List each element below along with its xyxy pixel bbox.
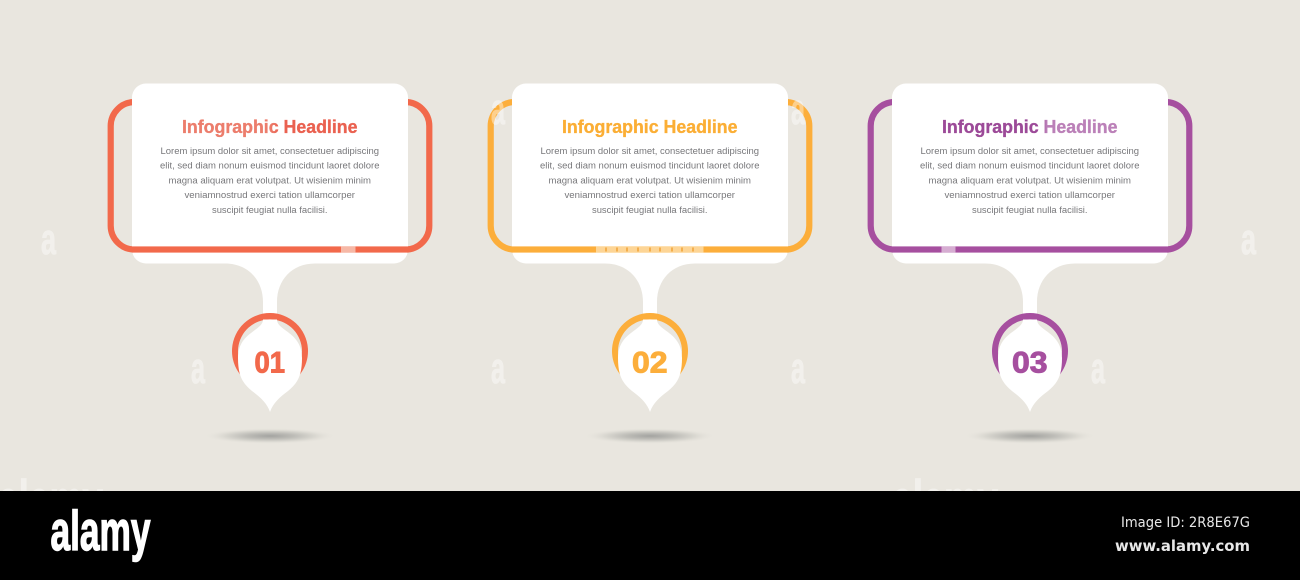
body text: veniamnostrud exerci tation ullamcorper (564, 190, 736, 201)
rounded outline (491, 102, 809, 250)
body text: magna aliquam erat volutpat. Ut wisienim minim (548, 175, 751, 186)
website: www.alamy.com (1115, 537, 1250, 555)
watermark letters: a (791, 85, 805, 134)
panel: step 03 (871, 84, 1189, 444)
watermark letters: a (1091, 344, 1105, 393)
rounded outline (111, 102, 429, 250)
watermark letters: a (491, 344, 505, 393)
watermark letters: a (191, 344, 205, 393)
pin (998, 320, 1062, 412)
image id: Image ID: 2R8E67G (1121, 515, 1250, 531)
body text: magna aliquam erat volutpat. Ut wisienim minim (928, 175, 1131, 186)
white card (132, 84, 408, 322)
body text: suscipit feugiat nulla facilisi. (972, 205, 1088, 216)
shadow (204, 428, 336, 444)
watermark letters (0, 85, 1256, 531)
body text: suscipit feugiat nulla facilisi. (212, 205, 328, 216)
watermark patch (942, 246, 956, 253)
body text: elit, sed diam nonum euismod tincidunt laoret dolore (540, 161, 760, 172)
watermark letters: alamy (0, 468, 103, 531)
body text (920, 146, 1140, 216)
headline: Infographic Headline (562, 117, 738, 137)
panel: step 01 (111, 84, 429, 444)
pin (618, 320, 682, 412)
rounded outline (871, 102, 1189, 250)
number: 01 (254, 346, 285, 379)
alamy logo: alamy (50, 499, 150, 562)
watermark patch (596, 246, 704, 253)
body text: veniamnostrud exerci tation ullamcorper (944, 190, 1116, 201)
watermark letters: a (791, 344, 805, 393)
outline bottom edge (132, 246, 408, 253)
headline: Infographic Headline (182, 117, 358, 137)
body text: Lorem ipsum dolor sit amet, consectetuer adipiscing (540, 146, 759, 157)
outline bottom edge (512, 246, 788, 253)
watermark letters: a (1241, 215, 1256, 264)
body text (540, 146, 760, 216)
footer bar (0, 491, 1300, 580)
pin (238, 320, 302, 412)
watermark letters: a (41, 215, 56, 264)
number: 03 (1012, 346, 1048, 379)
shadow (584, 428, 716, 444)
watermark letters: a (491, 85, 505, 134)
watermark letters: alamy (892, 468, 998, 531)
body text: veniamnostrud exerci tation ullamcorper (184, 190, 356, 201)
body text: elit, sed diam nonum euismod tincidunt laoret dolore (920, 161, 1140, 172)
ring (232, 313, 308, 375)
ring (612, 313, 688, 375)
body text: magna aliquam erat volutpat. Ut wisienim minim (168, 175, 371, 186)
white card (512, 84, 788, 322)
watermark patch (341, 246, 356, 253)
white card (892, 84, 1168, 322)
headline: Infographic Headline (942, 117, 1118, 137)
ring (992, 313, 1068, 375)
body text: Lorem ipsum dolor sit amet, consectetuer adipiscing (920, 146, 1139, 157)
panel: step 02 (491, 84, 809, 444)
body text: Lorem ipsum dolor sit amet, consectetuer adipiscing (160, 146, 379, 157)
body text: elit, sed diam nonum euismod tincidunt laoret dolore (160, 161, 380, 172)
number: 02 (632, 346, 668, 379)
body text: suscipit feugiat nulla facilisi. (592, 205, 708, 216)
body text (160, 146, 380, 216)
shadow (964, 428, 1096, 444)
outline bottom edge (892, 246, 1168, 253)
